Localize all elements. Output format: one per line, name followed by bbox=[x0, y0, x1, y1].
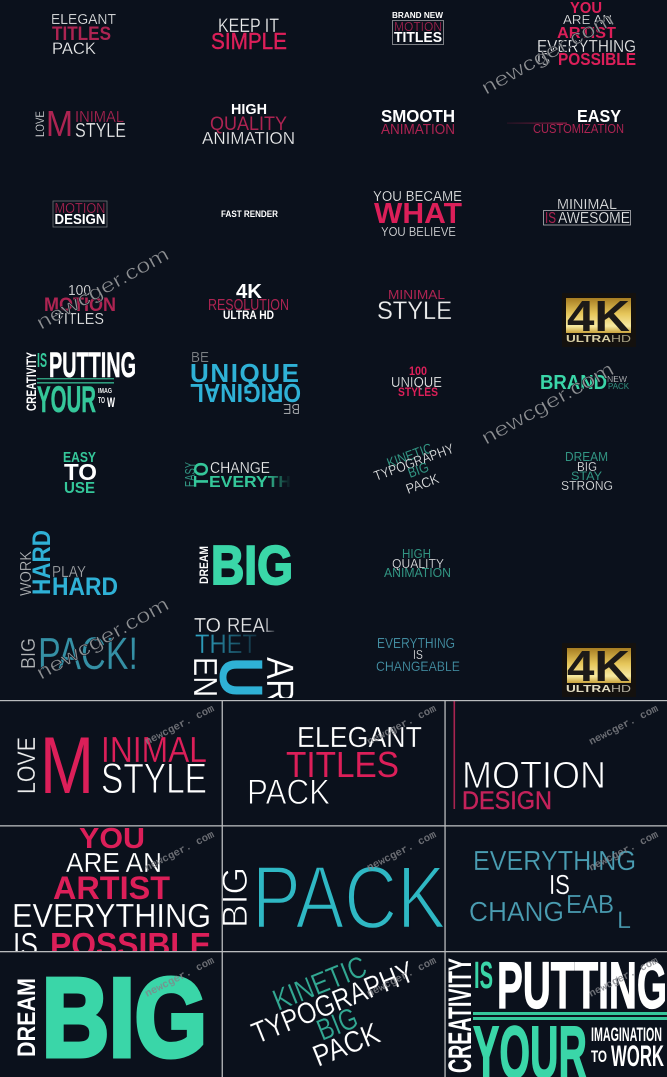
title: you became what you believe bbox=[373, 189, 462, 239]
panel: everything is changeable: IS bbox=[549, 869, 570, 900]
title: dream big stay strong: BIG bbox=[577, 459, 597, 474]
title: motion design bbox=[53, 201, 107, 228]
panel: creativity is putting your imagination to work: TO bbox=[591, 1047, 607, 1066]
grid dividers bbox=[0, 700, 667, 1077]
title: 100 unique styles bbox=[391, 365, 442, 399]
title: minimal style bbox=[377, 287, 452, 325]
watermarks: newcger grid: newcger. com bbox=[365, 955, 439, 1001]
panel: love minimal style: INIMAL bbox=[101, 729, 207, 770]
panel: elegant titles pack: ELEGANT bbox=[297, 722, 422, 754]
title: creativity is putting your imagination: TO bbox=[98, 396, 105, 405]
title: minimal is awesome: AWESOME bbox=[558, 210, 630, 227]
title: easy to change everything: TO bbox=[191, 462, 213, 487]
title: creativity is putting your imagination: PUTTING bbox=[49, 346, 136, 385]
title: be unique be original: BE bbox=[191, 350, 209, 366]
title: love minimal style bbox=[34, 103, 126, 144]
badge: 4k ultra hd: HD bbox=[611, 334, 631, 345]
title: you are an artist: YOU bbox=[570, 0, 602, 17]
panel: everything is changeable: EAB bbox=[566, 889, 614, 919]
badge: 4k ultra hd bbox=[562, 292, 636, 347]
badge: 4k ultra hd: ULTRA bbox=[566, 334, 611, 345]
title: be unique be original bbox=[190, 350, 301, 416]
title: elegant titles pack: PACK bbox=[52, 39, 97, 58]
panel: everything is changeable: CHANG bbox=[469, 896, 564, 927]
title: dream big stay strong: STRONG bbox=[561, 478, 613, 493]
panel: creativity is putting your imagination to work: CREATIVITY bbox=[442, 958, 478, 1073]
title: elegant titles pack: ELEGANT bbox=[51, 12, 116, 28]
title: creativity is putting your imagination: IMAG bbox=[98, 388, 112, 395]
title: easy customization bbox=[507, 106, 624, 136]
title: everything is changeable: EVERYTHING bbox=[377, 636, 455, 652]
title: 4k resolution ultra hd: ULTRA HD bbox=[223, 309, 274, 322]
title: dream big: DREAM bbox=[198, 546, 211, 584]
title: you are an artist: POSSIBLE bbox=[558, 49, 636, 69]
title: everything is changeable: CHANGEABLE bbox=[376, 658, 460, 674]
panel: everything is changeable bbox=[469, 845, 636, 934]
watermarks: newcger grid: newcger. com bbox=[143, 955, 217, 1001]
panel: big pack: BIG bbox=[216, 867, 255, 928]
title: to real the bbox=[194, 618, 294, 698]
title: 100 unique styles: 100 bbox=[409, 365, 427, 378]
title: elegant titles pack bbox=[51, 12, 116, 58]
title: big pack: PACK! bbox=[38, 628, 138, 679]
title: kinetic typography big pack: BIG bbox=[406, 459, 431, 481]
panel: creativity is putting your imagination to work bbox=[448, 958, 667, 1077]
panel: motion design bbox=[446, 700, 667, 825]
panel: creativity is putting your imagination to work: IS bbox=[474, 955, 493, 997]
title: big pack bbox=[18, 628, 138, 679]
panel: love minimal style bbox=[0, 700, 222, 825]
panel: kinetic typography big pack: PACK bbox=[308, 1017, 385, 1073]
title: brand new pack: BRAND bbox=[540, 372, 607, 394]
panel: elegant titles pack: PACK bbox=[247, 773, 330, 812]
title: be unique be original: ORIGINAL bbox=[190, 378, 301, 408]
title: elegant titles pack: TITLES bbox=[52, 24, 111, 45]
title: creativity is putting your imagination: YOUR bbox=[37, 379, 96, 420]
watermarks: newcger grid: newcger. com bbox=[143, 703, 217, 749]
badge: 4k ultra hd lower: ULTRA bbox=[566, 684, 611, 695]
title: high quality animation teal: HIGH bbox=[402, 546, 431, 561]
panel: elegant titles pack bbox=[223, 700, 444, 825]
title: brand new pack: PACK bbox=[608, 381, 629, 391]
title: to real the: AR bbox=[258, 657, 300, 703]
panel: motion design: MOTION bbox=[462, 755, 606, 797]
title: kinetic typography big pack: TYPOGRAPHY bbox=[372, 440, 456, 484]
panel: everything is changeable: L bbox=[617, 907, 631, 934]
title: brand new motion titles: TITLES bbox=[394, 30, 442, 46]
title: 100 unique styles: UNIQUE bbox=[391, 375, 442, 391]
title: work hard play hard: WORK bbox=[18, 551, 35, 596]
badge: 4k ultra hd lower bbox=[562, 642, 636, 697]
title: work hard play hard: HARD bbox=[29, 530, 56, 595]
watermarks: newcger grid: newcger. com bbox=[143, 829, 217, 875]
panel: elegant titles pack: TITLES bbox=[286, 744, 399, 785]
panel: dream big: DREAM bbox=[13, 978, 41, 1057]
title: 4k resolution ultra hd: RESOLUTION bbox=[208, 297, 289, 314]
title: minimal is awesome: IS bbox=[545, 210, 556, 227]
watermarks: newcger grid: newcger. com bbox=[587, 829, 661, 875]
title: keep it simple: KEEP IT bbox=[218, 16, 279, 37]
title: love minimal style: M bbox=[46, 103, 73, 144]
title: you are an artist: IS bbox=[537, 49, 550, 69]
title: be unique be original: UNIQUE bbox=[190, 358, 299, 388]
title: dream big stay strong bbox=[561, 449, 613, 493]
title: smooth animation bbox=[381, 106, 455, 138]
title: everything is changeable: IS bbox=[413, 647, 423, 662]
title: big pack: BIG bbox=[18, 638, 40, 669]
title: easy to change everything bbox=[183, 460, 291, 491]
title: love minimal style: STYLE bbox=[75, 120, 126, 142]
title: work hard play hard: HARD bbox=[52, 574, 118, 601]
panel: kinetic typography big pack bbox=[247, 950, 419, 1073]
panel: you are an artist: ARE AN bbox=[66, 847, 162, 878]
title: 100 motion titles: 100 bbox=[68, 283, 91, 299]
watermarks: newcger grid: newcger. com bbox=[365, 703, 439, 749]
panel: you are an artist bbox=[14, 828, 210, 951]
title: 100 motion titles bbox=[44, 283, 116, 328]
title: to real the: THET bbox=[195, 629, 257, 659]
title: high quality animation bbox=[202, 102, 295, 148]
panel: love minimal style: LOVE bbox=[13, 737, 41, 794]
title: easy to change everything: EASY bbox=[183, 462, 199, 487]
title: to real the: TO bbox=[194, 615, 221, 637]
title: minimal is awesome bbox=[544, 197, 630, 227]
panel: motion design: DESIGN bbox=[462, 787, 552, 815]
title: creativity is putting your imagination: IS bbox=[37, 350, 47, 372]
panel: you are an artist: ARTIST bbox=[53, 870, 170, 906]
title: you became what you believe: YOU BELIEVE bbox=[381, 224, 456, 239]
watermark: newcger middle right: newcger.com bbox=[478, 358, 618, 449]
title: motion design: MOTION bbox=[54, 201, 106, 217]
badge: 4k ultra hd: 4K bbox=[567, 292, 630, 341]
panel: kinetic typography big pack: TYPOGRAPHY bbox=[247, 955, 419, 1050]
title: dream big stay strong: DREAM bbox=[565, 449, 608, 464]
title: brand new motion titles bbox=[392, 10, 444, 46]
panel: kinetic typography big pack: KINETIC bbox=[268, 950, 371, 1017]
title: you became what you believe: YOU BECAME bbox=[373, 189, 462, 205]
watermarks: newcger grid: newcger. com bbox=[587, 955, 661, 1001]
panel: everything is changeable: EVERYTHING bbox=[473, 845, 636, 876]
title: love minimal style: LOVE bbox=[34, 111, 47, 137]
title: keep it simple bbox=[211, 16, 287, 54]
panel: you are an artist: EVERYTHING bbox=[12, 897, 211, 934]
title: high quality animation teal: QUALITY bbox=[392, 556, 444, 571]
panel: big pack: PACK bbox=[252, 847, 446, 947]
title: you are an artist: ARE AN bbox=[563, 12, 612, 27]
watermarks: newcger grid bbox=[143, 703, 661, 1001]
watermark: newcger top left: newcger.com bbox=[33, 243, 173, 334]
watermarks: newcger grid: newcger. com bbox=[365, 829, 439, 875]
title: creativity is putting your imagination bbox=[23, 346, 136, 420]
title: dream big stay strong: STAY bbox=[571, 469, 602, 483]
title: brand new motion titles: MOTION bbox=[394, 19, 442, 34]
title: easy customization: EASY bbox=[577, 106, 621, 126]
title: fast render: FAST RENDER bbox=[221, 209, 278, 220]
panel: dream big: BIG bbox=[42, 956, 207, 1077]
title: minimal is awesome: MINIMAL bbox=[557, 197, 617, 213]
title: high quality animation: ANIMATION bbox=[202, 128, 295, 148]
title: easy to use: USE bbox=[64, 480, 95, 497]
title: kinetic typography big pack: PACK bbox=[404, 470, 442, 497]
badge: 4k ultra hd lower: HD bbox=[611, 684, 631, 695]
title: work hard play hard bbox=[18, 530, 118, 601]
panel: love minimal style: STYLE bbox=[101, 755, 207, 803]
title: 100 unique styles: STYLES bbox=[398, 386, 438, 399]
title: high quality animation teal bbox=[384, 546, 451, 580]
badge: 4k ultra hd lower: 4K bbox=[567, 642, 630, 691]
title: keep it simple: SIMPLE bbox=[211, 28, 287, 54]
panel: love minimal style: M bbox=[40, 721, 94, 811]
panel: you are an artist: POSSIBLE bbox=[50, 926, 211, 963]
title: minimal style: STYLE bbox=[377, 298, 452, 325]
title: kinetic typography big pack bbox=[372, 440, 456, 497]
title: easy customization: CUSTOMIZATION bbox=[533, 121, 624, 136]
title: 100 motion titles: MOTION bbox=[44, 295, 116, 316]
panel: you are an artist: IS bbox=[13, 926, 38, 963]
panel: kinetic typography big pack: BIG bbox=[312, 1002, 363, 1047]
title: creativity is putting your imagination: W bbox=[107, 394, 115, 410]
title: easy to use: EASY bbox=[63, 450, 96, 466]
title: dream big: BIG bbox=[211, 534, 293, 596]
title: 100 motion titles: TITLES bbox=[55, 311, 104, 328]
title: love minimal style: INIMAL bbox=[75, 109, 124, 126]
title: be unique be original: BE bbox=[283, 400, 300, 416]
title: to real the: REAL bbox=[227, 615, 275, 637]
title: to real the: U bbox=[207, 657, 275, 698]
title: you became what you believe: WHAT bbox=[374, 198, 462, 230]
title: 4k resolution ultra hd: 4K bbox=[236, 281, 263, 303]
title: kinetic typography big pack: KINETIC bbox=[385, 440, 434, 471]
title: smooth animation: ANIMATION bbox=[381, 122, 455, 138]
title: 4k resolution ultra hd bbox=[208, 281, 289, 322]
title: minimal style: MINIMAL bbox=[388, 287, 445, 302]
title: to real the: EN bbox=[187, 657, 224, 697]
watermark: newcger top right: newcger.com bbox=[478, 8, 618, 99]
title: high quality animation: HIGH bbox=[231, 102, 267, 118]
title: high quality animation: QUALITY bbox=[210, 114, 287, 135]
title: easy to change everything: EVERYTH bbox=[209, 474, 291, 491]
title: you are an artist bbox=[537, 0, 636, 69]
title: you are an artist: EVERYTHING bbox=[537, 36, 636, 56]
title: motion design: DESIGN bbox=[54, 212, 106, 228]
title: high quality animation teal: ANIMATION bbox=[384, 565, 451, 580]
title: easy to use: TO bbox=[64, 459, 97, 485]
title: brand new pack: NEW bbox=[607, 374, 628, 384]
title: work hard play hard: PLAY bbox=[52, 564, 86, 581]
title: easy to change everything: CHANGE bbox=[210, 460, 270, 477]
title: creativity is putting your imagination: CREATIVITY bbox=[23, 352, 39, 411]
watermarks: newcger grid: newcger. com bbox=[587, 703, 661, 749]
title: everything is changeable bbox=[376, 636, 460, 674]
panel: you are an artist: YOU bbox=[79, 823, 145, 855]
watermark: newcger lower left: newcger.com bbox=[33, 593, 173, 684]
title: brand new motion titles: BRAND NEW bbox=[392, 10, 444, 20]
title: smooth animation: SMOOTH bbox=[381, 106, 455, 126]
title: easy to use bbox=[63, 450, 97, 497]
title: you are an artist: ARTIST bbox=[557, 25, 616, 42]
